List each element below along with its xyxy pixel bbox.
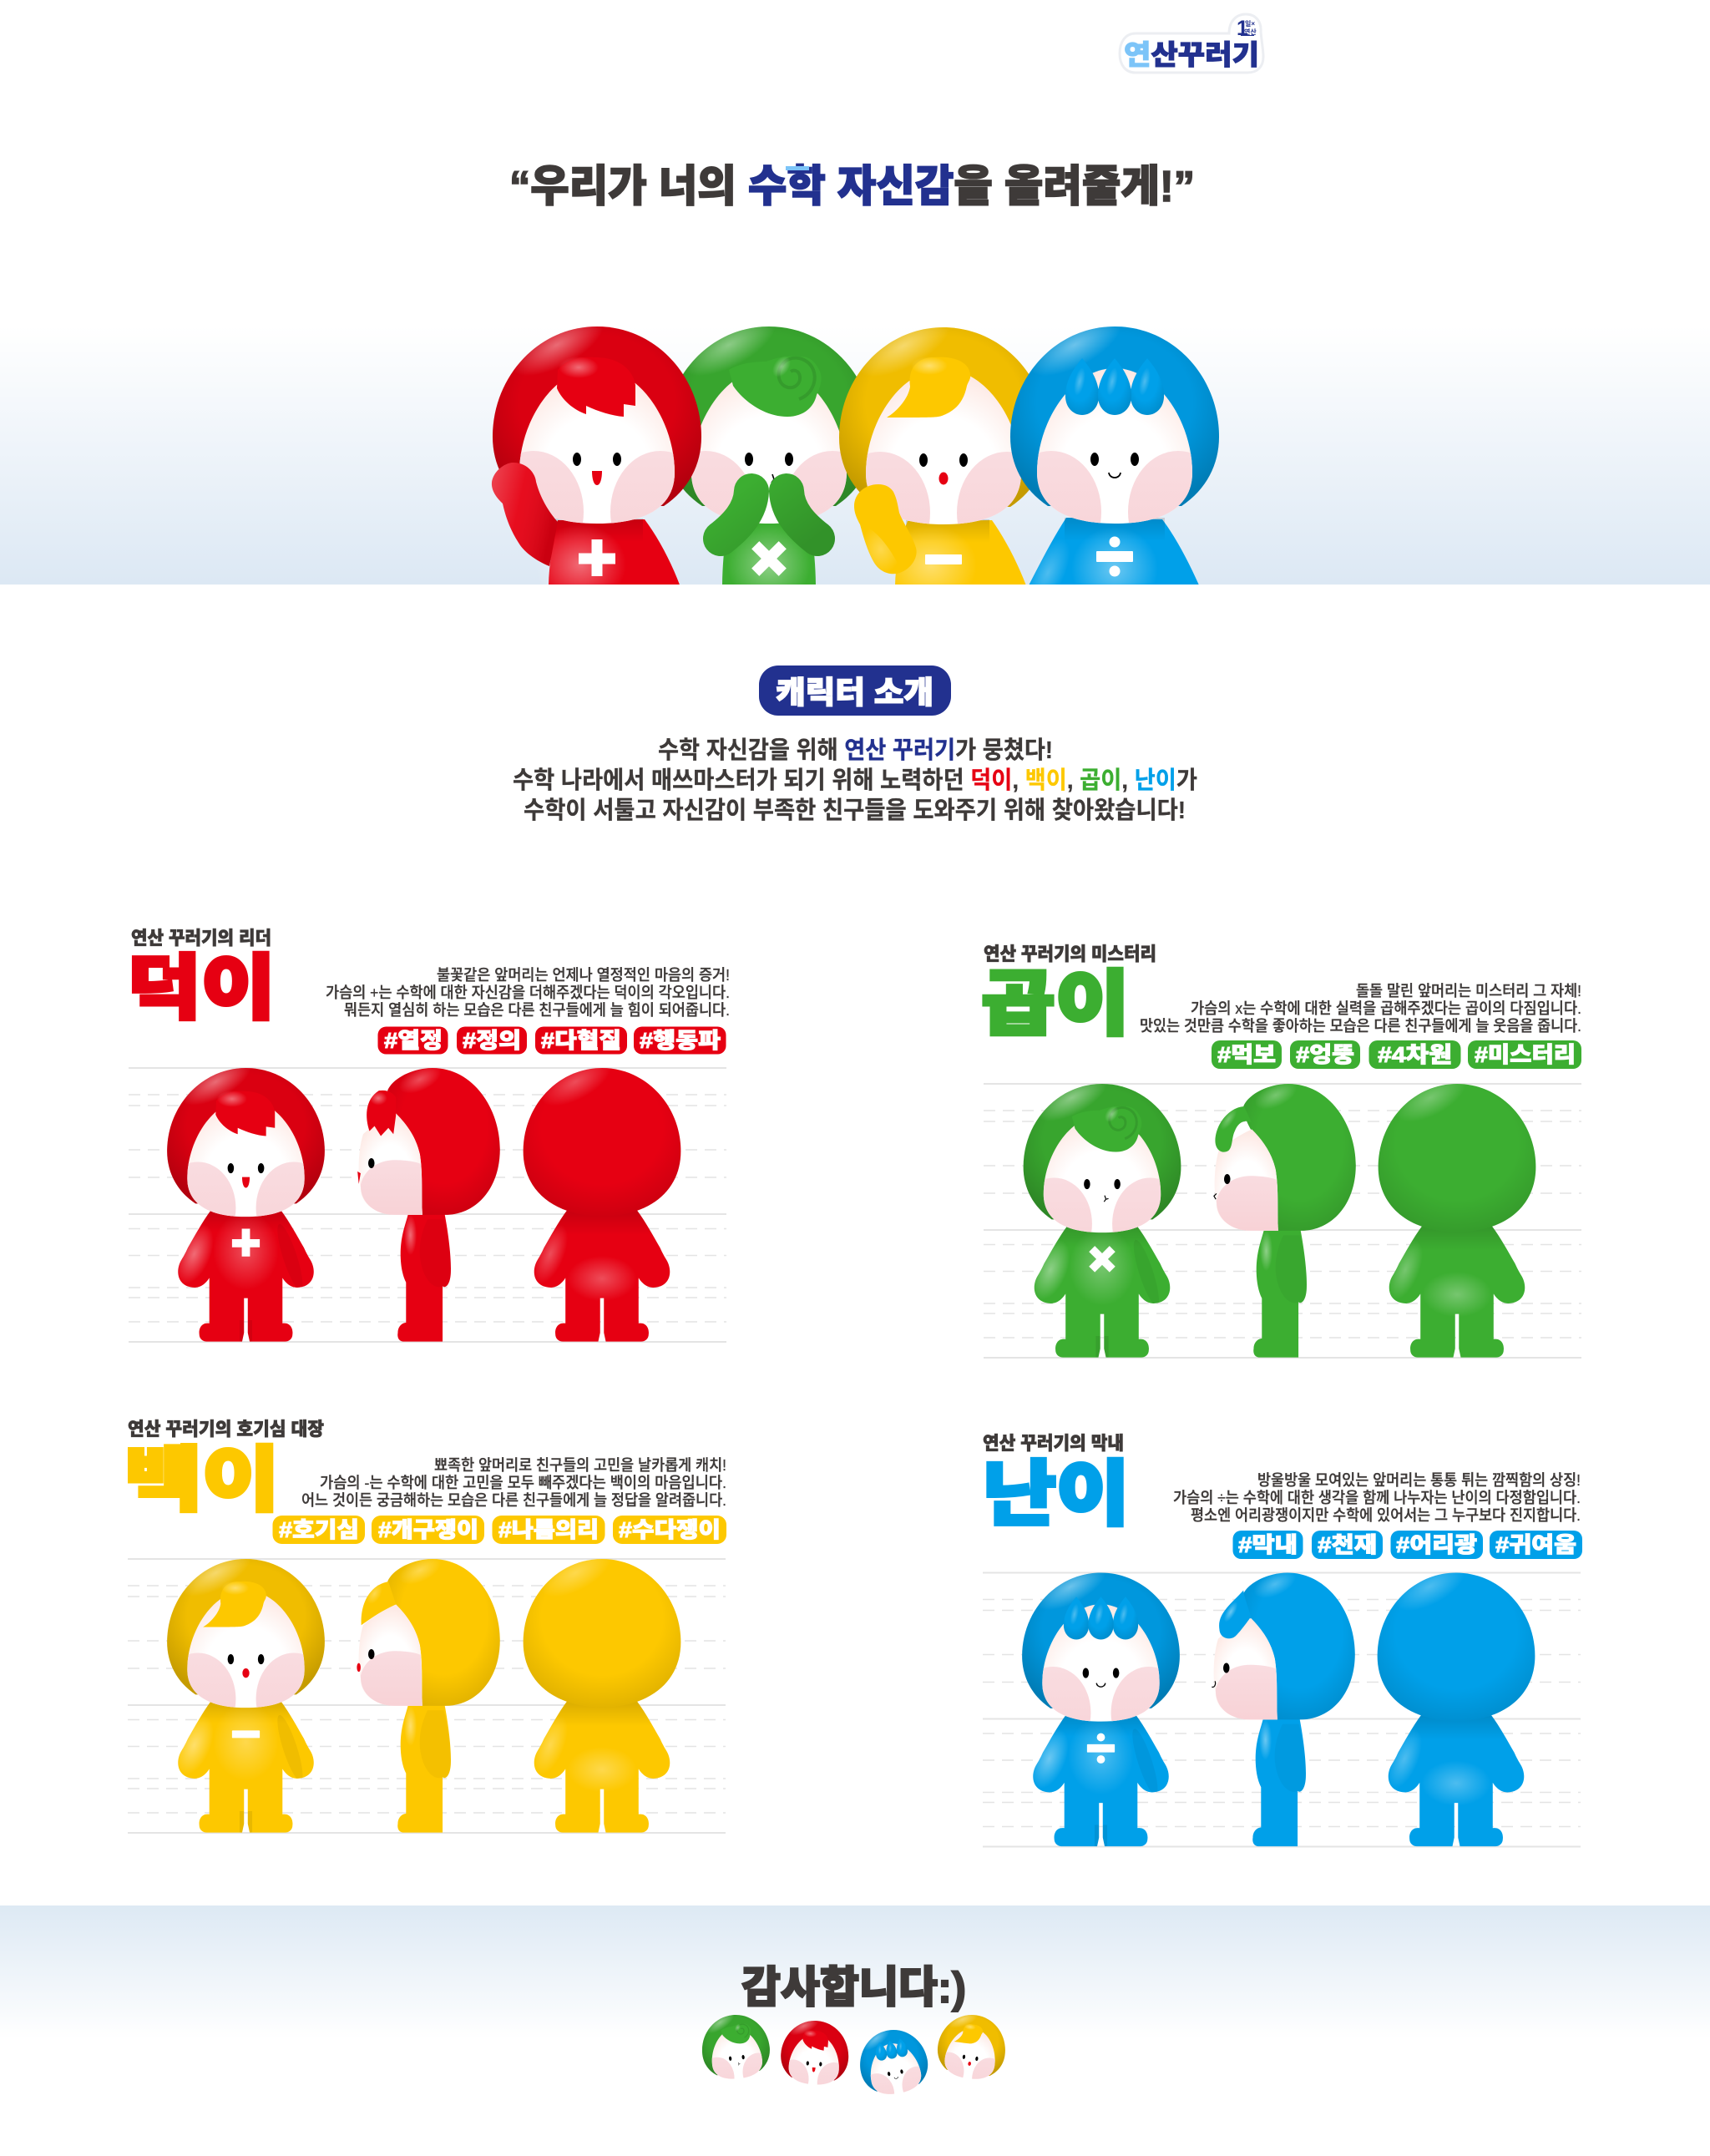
character: yellow waving: [839, 327, 1030, 585]
tags: #어리광: [1396, 1532, 1477, 1557]
tags: #행동파: [640, 1028, 721, 1053]
tags: [272, 1516, 726, 1544]
tags: #개구쟁이: [378, 1517, 478, 1542]
title: “우리가 너의 수학 자신감을 올려줄게!”: [509, 163, 1195, 211]
description: 가슴의 +는 수학에 대한 자신감을 더해주겠다는 덕이의 각오입니다.: [326, 984, 730, 1001]
description: [1173, 1471, 1581, 1524]
description: 불꽃같은 앞머리는 언제나 열정적인 마음의 증거!: [437, 966, 730, 984]
description: 어느 것이든 궁금해하는 모습은 다른 친구들에게 늘 정답을 알려줍니다.: [301, 1491, 726, 1509]
back view: [1378, 1552, 1535, 1846]
section badge: 캐릭터 소개: 캐릭터 소개: [776, 676, 933, 710]
logo: 연산꾸러기: 연산: [1244, 28, 1257, 36]
front view: [160, 1540, 331, 1833]
icon: blue head: [850, 2016, 938, 2115]
height guide lines: [129, 1068, 726, 1342]
tags: #4차원: [1378, 1042, 1452, 1067]
thank-you heading: 감사합니다:): [741, 1964, 966, 2012]
intro paragraph: 수학이 서툴고 자신감이 부족한 친구들을 도와주기 위해 찾아왔습니다!: [524, 797, 1186, 824]
tags: #먹보: [1217, 1042, 1276, 1067]
tags: #열정: [384, 1028, 443, 1053]
description: 평소엔 어리광쟁이지만 수학에 있어서는 그 누구보다 진지합니다.: [1191, 1506, 1581, 1524]
tags: #나름의리: [498, 1517, 599, 1542]
subtitle: 연산 꾸러기의 막내: [983, 1433, 1124, 1454]
character: blue smiling: [1010, 326, 1219, 585]
back view: [524, 1539, 680, 1833]
description: [1140, 982, 1581, 1035]
character: red waving: [491, 326, 701, 585]
footer mini heads: [695, 2002, 1014, 2115]
panel: 백이: [124, 1419, 726, 1833]
footer background band: [0, 1905, 1710, 2039]
description: 맛있는 것만큼 수학을 좋아하는 모습은 다른 친구들에게 늘 웃음을 줍니다.: [1140, 1017, 1581, 1035]
tags: #다혈질: [541, 1028, 621, 1053]
description: 돌돌 말린 앞머리는 미스터리 그 자체!: [1356, 982, 1581, 1000]
logo: 연산꾸러기: 연산꾸러기: [1124, 39, 1259, 70]
intro paragraph: 수학 나라에서 매쓰마스터가 되기 위해 노력하던 덕이, 백이, 곱이, 난이가: [513, 767, 1197, 794]
description: 뾰족한 앞머리로 친구들의 고민을 날카롭게 캐치!: [434, 1456, 726, 1474]
intro paragraph: 수학 자신감을 위해 연산 꾸러기가 뭉쳤다!: [658, 736, 1053, 764]
intro paragraph: [513, 736, 1197, 824]
side view: [1212, 1564, 1355, 1846]
height guide lines: [128, 1559, 726, 1833]
logo: 연산꾸러기: 일×: [1245, 19, 1255, 28]
name: 백이: [124, 1441, 280, 1521]
name: 덕이: [127, 949, 276, 1029]
description: 방울방울 모여있는 앞머리는 통통 튀는 깜찍함의 상징!: [1257, 1471, 1581, 1489]
name: 곱이: [981, 965, 1130, 1045]
tags: [1232, 1531, 1582, 1559]
side view: [357, 1551, 500, 1833]
front view: [1016, 1065, 1188, 1358]
tags: #미스터리: [1475, 1042, 1576, 1067]
subtitle: 연산 꾸러기의 호기심 대장: [128, 1419, 324, 1440]
tags: [1212, 1040, 1581, 1069]
height guide lines: [983, 1573, 1581, 1847]
tags: #막내: [1238, 1532, 1298, 1557]
icon: red head: [775, 2010, 854, 2103]
icon: green head: [695, 2003, 777, 2098]
tags: [377, 1027, 726, 1054]
description: [326, 966, 730, 1019]
description: 가슴의 x는 수학에 대한 실력을 곱해주겠다는 곱이의 다짐입니다.: [1191, 1000, 1581, 1017]
description: [301, 1456, 726, 1509]
tags: #호기심: [279, 1517, 359, 1542]
hero background band: [0, 326, 1710, 585]
back view: [524, 1048, 680, 1342]
section badge: 캐릭터 소개: [759, 666, 951, 716]
description: 가슴의 -는 수학에 대한 고민을 모두 빼주겠다는 백이의 마음입니다.: [320, 1474, 726, 1491]
logo: 연산꾸러기: 1: [1237, 17, 1248, 40]
description: 가슴의 ÷는 수학에 대한 생각을 함께 나누자는 난이의 다정함입니다.: [1173, 1489, 1581, 1506]
tags: #정의: [463, 1028, 521, 1053]
panel: 덕이: [127, 928, 730, 1342]
side view: [357, 1060, 500, 1342]
hero: four characters: [491, 326, 1219, 585]
tags: #천재: [1318, 1532, 1377, 1557]
panel: 곱이: [981, 944, 1581, 1358]
tags: #귀여움: [1495, 1532, 1576, 1557]
description: 뭐든지 열심히 하는 모습은 다른 친구들에게 늘 힘이 되어줍니다.: [344, 1001, 730, 1019]
tags: #수다쟁이: [619, 1517, 721, 1542]
subtitle: 연산 꾸러기의 미스터리: [984, 944, 1156, 964]
panel: 난이: [983, 1433, 1582, 1847]
tags: #엉뚱: [1296, 1042, 1354, 1067]
back view: [1379, 1064, 1535, 1358]
side view: [1214, 1075, 1356, 1358]
character: green with hands over mouth: [683, 326, 857, 585]
front view: [160, 1049, 331, 1342]
logo: 연산꾸러기: [1120, 14, 1263, 73]
height guide lines: [984, 1084, 1581, 1358]
name: 난이: [983, 1455, 1130, 1535]
front view: [1015, 1554, 1186, 1846]
subtitle: 연산 꾸러기의 리더: [131, 928, 271, 949]
icon: yellow head: [928, 2002, 1014, 2099]
